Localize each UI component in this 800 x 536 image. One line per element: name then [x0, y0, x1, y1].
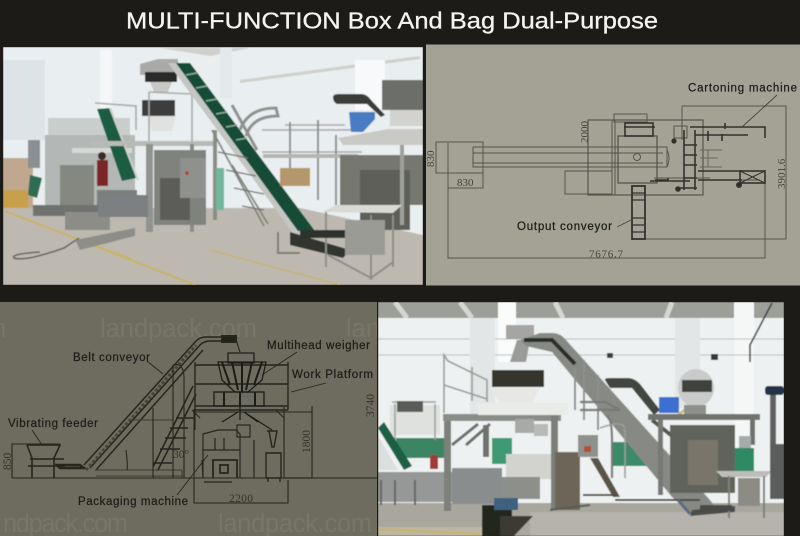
small green conveyor — [97, 108, 136, 181]
dark machine parts — [624, 123, 765, 239]
right machine with blue crate — [333, 94, 385, 117]
right weigher and platform — [678, 369, 714, 407]
side table — [716, 471, 772, 477]
dimension: 1800: 1800 — [301, 430, 313, 453]
floor — [378, 503, 784, 536]
ceiling — [378, 302, 784, 318]
main inclined belt conveyor — [168, 62, 300, 235]
central platform — [444, 355, 487, 413]
packaging machines — [202, 425, 312, 482]
right edge machine — [765, 386, 784, 395]
label: Vibrating feeder: Vibrating feeder — [8, 418, 98, 430]
rear platform — [262, 125, 362, 152]
leader lines — [617, 95, 777, 227]
dimension: 30 degrees: 30° — [173, 449, 190, 461]
watermarks: landpack.com — [100, 315, 257, 343]
leader lines — [32, 352, 326, 495]
title: MULTI-FUNCTION Box And Bag Dual-Purpose — [126, 8, 658, 34]
main inclined belt — [520, 333, 716, 515]
green wall band and background line — [396, 438, 444, 458]
stair rail and curved conveyor — [232, 105, 278, 150]
dimension: 2200: 2200 — [229, 493, 253, 505]
green tank — [735, 448, 754, 475]
multihead weigher — [214, 353, 272, 430]
label: Packaging machine: Packaging machine — [78, 496, 188, 508]
central weigher and platform — [140, 59, 178, 75]
panel: factory photo of assembled line — [378, 302, 784, 536]
dimension: 3740: 3740 — [365, 394, 377, 417]
label: Output conveyor: Output conveyor — [517, 221, 612, 233]
watermarks — [0, 315, 380, 536]
background line — [45, 135, 135, 210]
weigher and hopper — [506, 325, 534, 339]
dimension: 850: 850 — [2, 452, 14, 470]
panel: factory photo of box and bag line — [3, 47, 423, 285]
dimension: 3901.6: 3901.6 — [776, 158, 788, 189]
control panels — [515, 419, 534, 433]
dimension: 830 vertical: 830 — [425, 150, 437, 167]
label: Work Platform: Work Platform — [292, 369, 373, 381]
watermarks: lan — [346, 315, 380, 343]
second conveyor — [605, 378, 660, 415]
dimension: 7676.7: 7676.7 — [589, 248, 624, 260]
packaging machine — [506, 454, 551, 479]
panel: side-view drawing — [0, 302, 380, 536]
label: Belt conveyor: Belt conveyor — [73, 352, 150, 364]
layout lines — [436, 106, 786, 258]
label: Multihead weigher: Multihead weigher — [267, 340, 370, 352]
label: Cartoning machine: Cartoning machine — [688, 82, 797, 94]
side table — [322, 205, 402, 213]
dimension: 2000: 2000 — [579, 120, 591, 143]
floor — [3, 208, 423, 285]
side view machine lines — [12, 336, 377, 503]
panel: top-view layout drawing — [425, 44, 800, 286]
dimension: 830 horizontal: 830 — [457, 177, 474, 189]
blue crate — [659, 397, 679, 413]
